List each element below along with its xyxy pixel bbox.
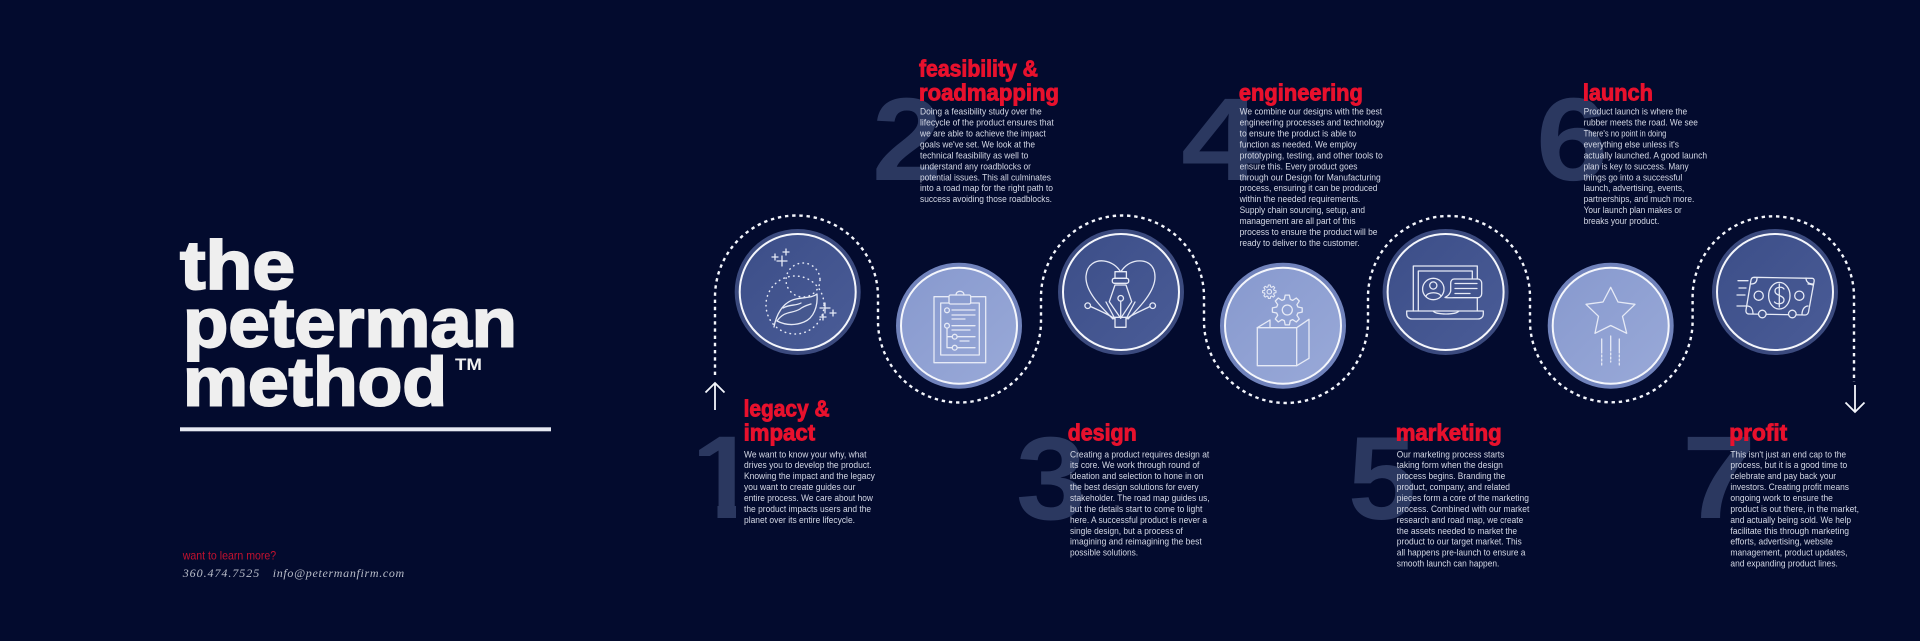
panel: step 2 feasibility and roadmapping	[872, 56, 1059, 206]
infographic canvas	[180, 59, 1866, 580]
number 7: 7	[1682, 412, 1756, 544]
body text: success avoiding those roadblocks.	[920, 194, 1052, 204]
body text: Our marketing process starts	[1397, 449, 1505, 459]
body text: things go into a successful	[1584, 172, 1682, 182]
body text: investors. Creating profit means	[1730, 482, 1849, 492]
body text: within the needed requirements.	[1239, 194, 1360, 204]
body text: efforts, advertising, website	[1730, 537, 1833, 547]
body text: Product launch is where the	[1584, 107, 1687, 117]
body text: through our Design for Manufacturing	[1240, 172, 1381, 182]
heading: legacy and impact: legacy &	[744, 396, 830, 422]
body text: process. Combined with our market	[1397, 504, 1530, 514]
body text: plan is key to success. Many	[1584, 161, 1689, 171]
body text: drives you to develop the product.	[744, 460, 872, 470]
number 2: 2	[872, 74, 942, 206]
body text: facilitate this through marketing	[1730, 526, 1849, 536]
number 1: 1	[691, 412, 757, 544]
heading: engineering: engineering	[1239, 80, 1363, 106]
body text: management are all part of this	[1240, 216, 1356, 226]
number 3: 3	[1016, 413, 1086, 545]
heading: marketing: marketing	[1396, 420, 1502, 446]
step 5 circle: laptop icon	[1383, 229, 1509, 355]
title: method: method	[183, 344, 447, 421]
body text: possible solutions.	[1070, 548, 1138, 558]
body text: we are able to achieve the impact	[919, 129, 1046, 139]
dotted process path	[715, 216, 1854, 403]
title block	[180, 227, 517, 421]
body text: launch, advertising, events,	[1584, 183, 1684, 193]
phone number: 360.474.7525	[182, 566, 259, 580]
body text: and expanding product lines.	[1730, 559, 1838, 569]
email address: info@petermanfirm.com	[273, 566, 405, 580]
body text: process begins. Branding the	[1397, 471, 1505, 481]
body text: product is out there, in the market,	[1730, 504, 1859, 514]
arrow: start up	[706, 383, 724, 410]
heading: feasibility and roadmapping: feasibility &	[919, 56, 1038, 82]
body text: goals we've set. We look at the	[920, 140, 1035, 150]
body text: product to our target market. This	[1397, 537, 1522, 547]
arrow: end down	[1846, 385, 1864, 412]
body text: ready to deliver to the customer.	[1240, 238, 1360, 248]
body text: Creating a product requires design at	[1070, 449, 1210, 459]
step 2 circle: clipboard icon	[896, 263, 1022, 389]
heading: legacy and impact: impact	[744, 420, 815, 446]
step 3 circle: heart and pen icon	[1058, 229, 1184, 355]
panel: step 1 legacy and impact	[699, 399, 875, 525]
body text: ongoing work to ensure the	[1730, 493, 1833, 503]
body text	[1584, 107, 1707, 226]
body text: We want to know your why, what	[744, 449, 867, 459]
body text: to ensure the product is able to	[1240, 129, 1356, 139]
body text: Your launch plan makes or	[1584, 205, 1682, 215]
heading: feasibility and roadmapping	[919, 56, 1059, 106]
body text: its core. We work through round of	[1070, 460, 1200, 470]
panel: step 3 design	[1016, 413, 1210, 558]
body text: lifecycle of the product ensures that	[920, 118, 1054, 128]
body text: ideation and selection to hone in on	[1070, 471, 1204, 481]
body text	[1397, 449, 1530, 569]
body text: stakeholder. The road map guides us,	[1070, 493, 1210, 503]
heading: profit: profit	[1729, 420, 1788, 446]
panel: step 7 profit	[1682, 412, 1859, 569]
body text: product, company, and related	[1397, 482, 1510, 492]
body text: entire process. We care about how	[744, 493, 873, 503]
body text	[1239, 107, 1385, 248]
heading: design: design	[1068, 420, 1137, 446]
body text: imagining and reimagining the best	[1070, 537, 1202, 547]
body text: you want to create guides our	[744, 482, 855, 492]
body text	[1070, 449, 1210, 558]
body text: We combine our designs with the best	[1240, 107, 1382, 117]
body text	[919, 107, 1054, 204]
body text: partnerships, and much more.	[1584, 194, 1694, 204]
body text: Supply chain sourcing, setup, and	[1240, 205, 1365, 215]
body text: but the details start to come to light	[1070, 504, 1203, 514]
body text: and actually being sold. We help	[1730, 515, 1851, 525]
body text: ensure this. Every product goes	[1240, 161, 1358, 171]
body text: process, ensuring it can be produced	[1240, 183, 1378, 193]
body text: management, product updates,	[1730, 548, 1848, 558]
title underline	[180, 427, 551, 431]
body text	[744, 449, 875, 525]
body text: actually launched. A good launch	[1584, 150, 1707, 160]
body text: engineering processes and technology	[1240, 118, 1385, 128]
title: peterman: peterman	[183, 285, 517, 362]
body text: here. A successful product is never a	[1070, 515, 1208, 525]
heading: feasibility and roadmapping: roadmapping	[919, 80, 1059, 106]
body text: celebrate and pay back your	[1730, 471, 1836, 481]
body text: prototyping, testing, and other tools to	[1240, 150, 1383, 160]
contact prompt: want to learn more?	[182, 548, 276, 562]
panel: step 4 engineering	[1181, 74, 1385, 248]
body text: research and road map, we create	[1397, 515, 1523, 525]
body text: Doing a feasibility study over the	[920, 107, 1042, 117]
body text: single design, but a process of	[1070, 526, 1183, 536]
body text: There's no point in doing	[1584, 129, 1666, 139]
heading: legacy and impact	[744, 396, 830, 446]
panel: step 5 marketing	[1348, 413, 1530, 569]
body text: breaks your product.	[1584, 216, 1659, 226]
body text: the assets needed to market the	[1397, 526, 1517, 536]
number 5: 5	[1348, 413, 1416, 545]
trademark symbol: TM	[455, 355, 482, 374]
body text	[1730, 449, 1859, 569]
number 4: 4	[1181, 74, 1261, 206]
title: the: the	[180, 227, 295, 304]
body text: smooth launch can happen.	[1397, 559, 1499, 569]
number 6: 6	[1536, 74, 1608, 206]
body text: taking form when the design	[1397, 460, 1503, 470]
body text: This isn't just an end cap to the	[1730, 449, 1846, 459]
body text: into a road map for the right path to	[920, 183, 1053, 193]
body text: potential issues. This all culminates	[920, 172, 1051, 182]
body text: all happens pre-launch to ensure a	[1397, 548, 1526, 558]
body text: rubber meets the road. We see	[1584, 118, 1698, 128]
body text: process, but it is a good time to	[1730, 460, 1847, 470]
body text: pieces form a core of the marketing	[1397, 493, 1529, 503]
step 6 circle: star icon	[1548, 263, 1674, 389]
body text: technical feasibility as well to	[920, 150, 1028, 160]
body text: everything else unless it's	[1584, 140, 1679, 150]
body text: Knowing the impact and the legacy	[744, 471, 875, 481]
body text: process to ensure the product will be	[1240, 227, 1378, 237]
contact block	[182, 548, 405, 580]
body text: the product impacts users and the	[744, 504, 871, 514]
step 4 circle: gears and box icon	[1220, 263, 1346, 389]
step 7 circle: money icon	[1712, 229, 1838, 355]
body text: understand any roadblocks or	[920, 161, 1031, 171]
panel: step 6 launch	[1536, 74, 1707, 226]
body text: planet over its entire lifecycle.	[744, 515, 855, 525]
body text: function as needed. We employ	[1240, 140, 1357, 150]
step 1 circle: leaf icon	[735, 229, 861, 355]
body text: the best design solutions for every	[1070, 482, 1199, 492]
heading: launch: launch	[1583, 80, 1653, 106]
